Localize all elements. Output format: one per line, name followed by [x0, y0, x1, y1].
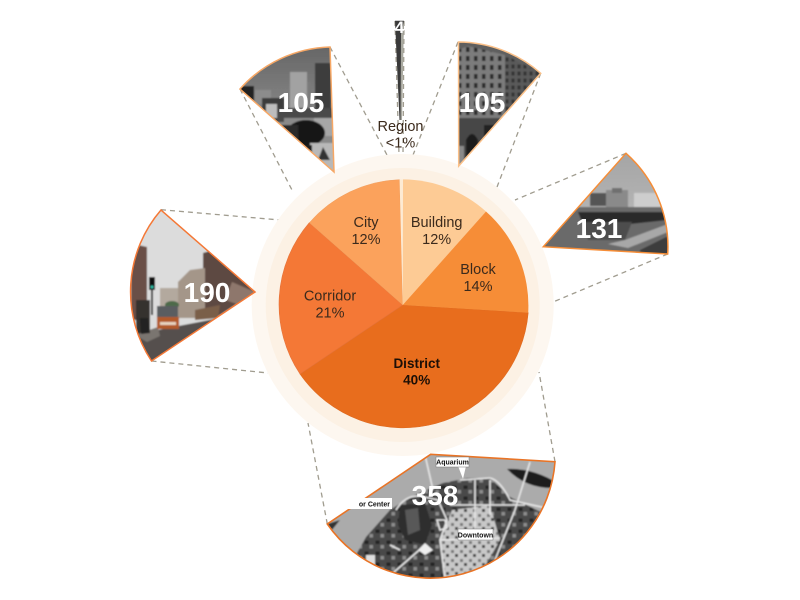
- label: corridor: Corridor: [304, 288, 356, 304]
- slice: city 12%: [309, 180, 403, 305]
- label: city: City: [354, 215, 378, 231]
- photo wedge: region: 4: [395, 18, 405, 37]
- photo wedge: building: [455, 40, 545, 170]
- photo wedge: building: 105: [459, 87, 505, 118]
- label: block: Block: [460, 262, 496, 278]
- photo wedge: city: [239, 46, 335, 174]
- map tag: center: [346, 498, 392, 509]
- label: region: <1%: [386, 136, 415, 152]
- pie chart: [279, 179, 528, 428]
- map tag: downtown: [458, 529, 493, 540]
- slice: corridor 21%: [279, 223, 403, 374]
- map tag: center: or Center: [359, 502, 390, 508]
- dashed connector lines: [152, 21, 668, 524]
- label: building: 12%: [422, 232, 451, 248]
- label: district: District: [393, 356, 440, 371]
- infographic canvas: [130, 20, 669, 579]
- label: corridor: 21%: [315, 306, 345, 322]
- label: city: 12%: [351, 232, 381, 248]
- photo wedge: city: 105: [278, 87, 324, 118]
- slice: block 14%: [403, 212, 528, 313]
- label: district: 40%: [403, 372, 430, 388]
- slice: building 12%: [403, 179, 486, 305]
- label: building: Building: [411, 215, 462, 231]
- photo wedge: region: [395, 18, 405, 120]
- map tag: downtown: Downtown: [458, 532, 493, 540]
- photo wedge: corridor: 190: [184, 277, 230, 308]
- photo wedge: district map: [326, 454, 556, 579]
- pie background rings: [252, 154, 554, 456]
- slice: district 40%: [300, 305, 528, 428]
- map tag: aquarium: [436, 457, 469, 479]
- map tag: aquarium: Aquarium: [436, 460, 469, 466]
- photo wedge: block: 131: [576, 213, 622, 244]
- label: region: Region: [378, 119, 423, 135]
- slice: region under 1%: [400, 179, 403, 305]
- photo wedge: block: [542, 152, 669, 255]
- label: block: 14%: [463, 279, 493, 295]
- photo wedge: corridor: [130, 209, 256, 362]
- photo wedge: district map: 358: [412, 480, 458, 511]
